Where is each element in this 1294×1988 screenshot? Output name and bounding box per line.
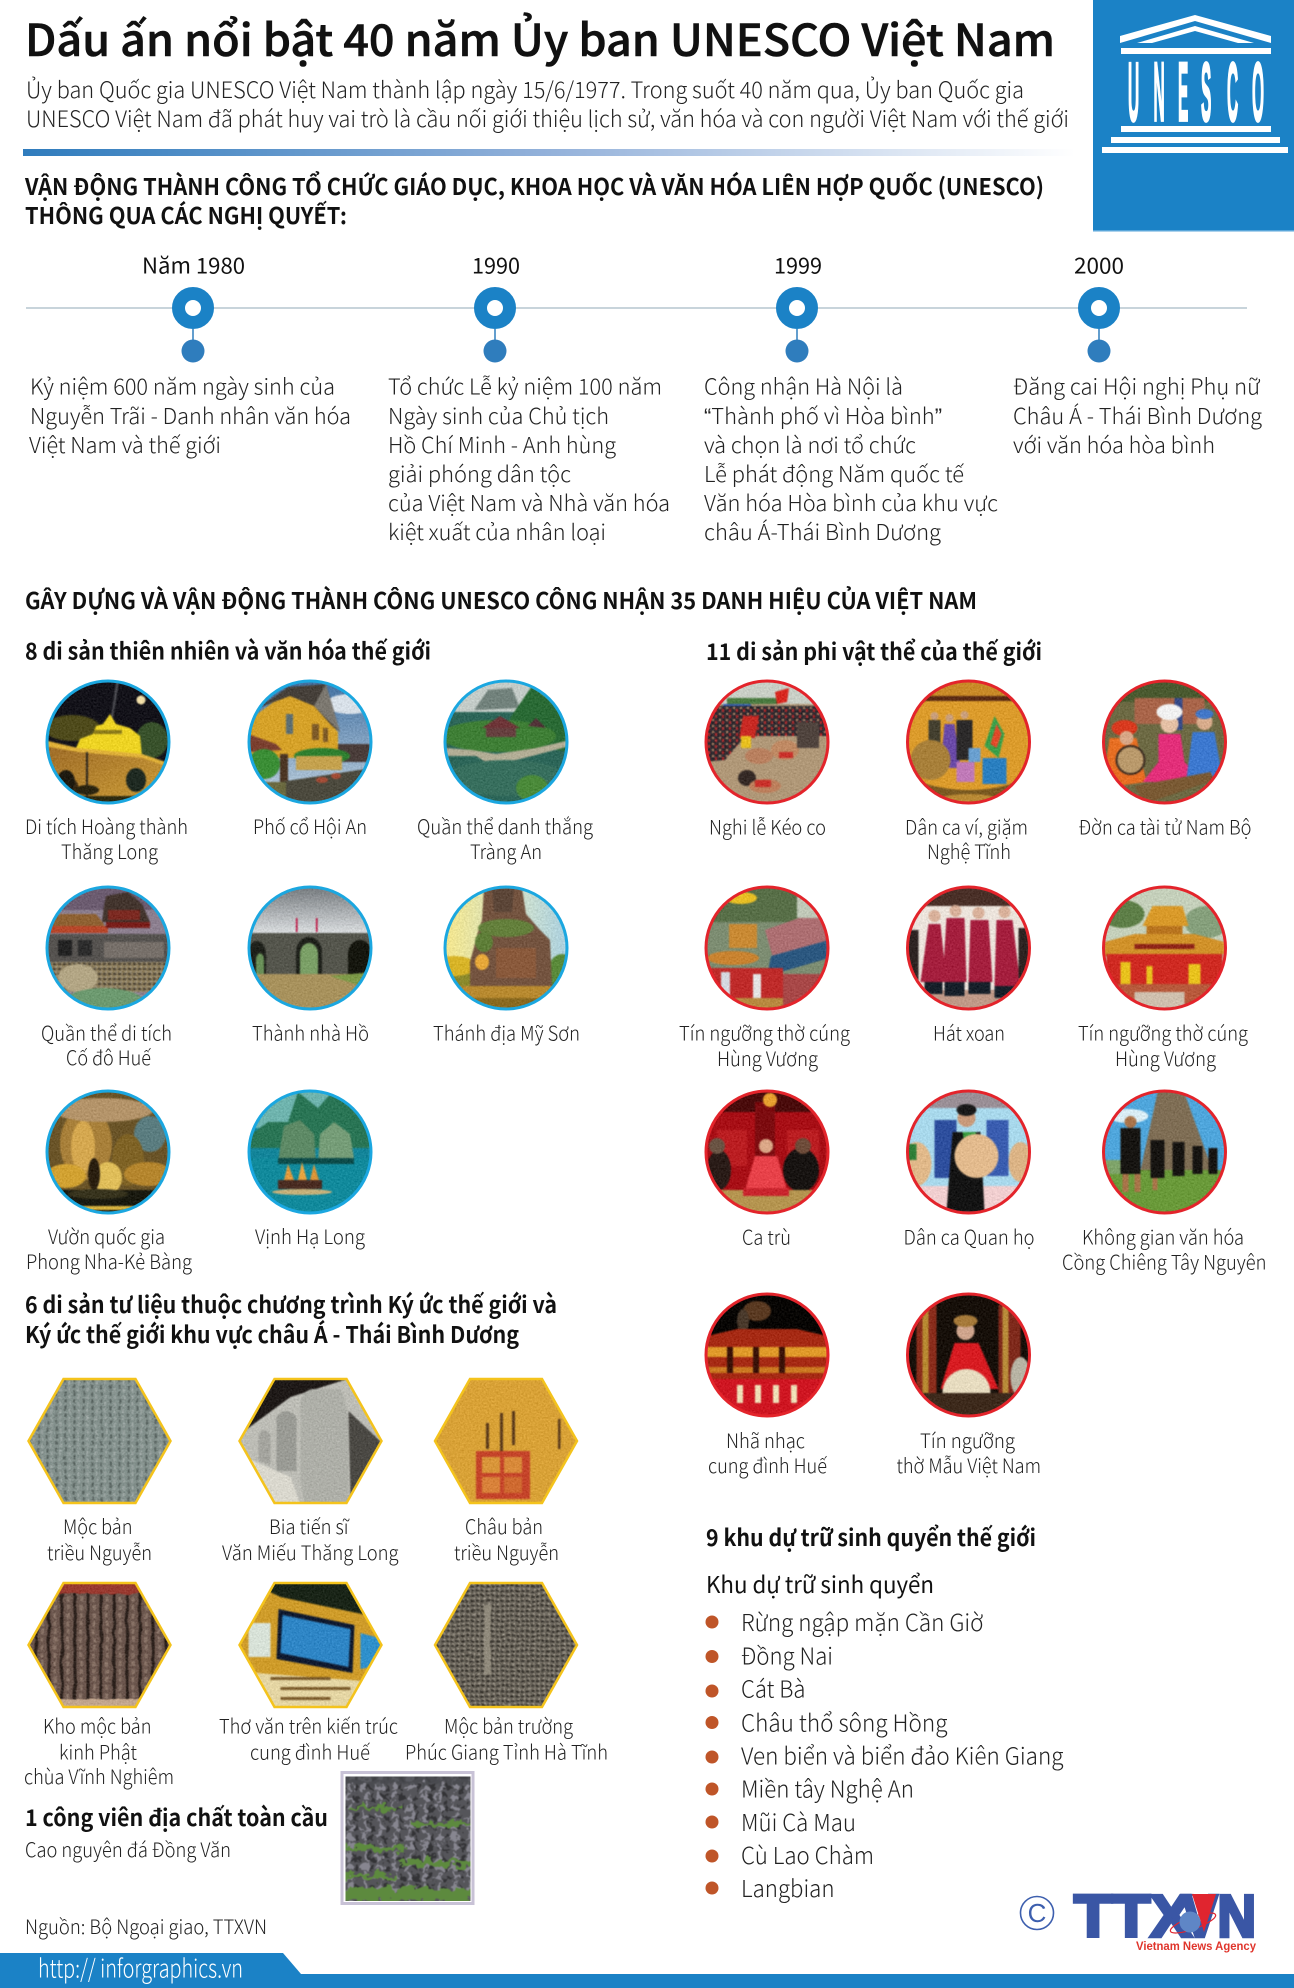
photo: Tin nguong Hung Vuong 1 [703,884,831,1012]
caption: Kho mộc bản [43,1710,152,1740]
timeline item: 1990: giải phóng dân tộc [388,457,571,489]
timeline item: 1999: “Thành phố vì Hòa bình” [704,399,942,431]
timeline [26,248,1262,547]
intro text: UNESCO Việt Nam đã phát huy vai trò là cầu nối giới thiệu lịch sử, văn hóa và con người Việt Nam với thế giới [26,102,1069,134]
timeline item: 1999: Lễ phát động Năm quốc tế [704,457,964,489]
timeline item: 2000: 2000 [1074,248,1124,280]
photo: Quan ho [902,1088,1032,1216]
caption: Phong Nha-Kẻ Bàng [26,1246,192,1275]
caption: Phố cổ Hội An [253,811,367,840]
caption [24,1710,174,1790]
subheading: 9 reserves: 9 khu dự trữ sinh quyển thế giới [706,1519,1036,1553]
photo: Dong Van plateau [325,1756,490,1921]
timeline item: 1980: Việt Nam và thế giới [29,428,221,460]
timeline item: 1999: Công nhận Hà Nội là [704,370,903,402]
hexagon: Phuc Giang [434,1582,578,1708]
subheading: 6 documentary heritages: 6 di sản tư liệu thuộc chương trình Ký ức thế giới và [25,1286,557,1320]
subheading: 8 heritage sites: 8 di sản thiên nhiên và văn hóa thế giới [25,632,431,666]
caption [26,1221,192,1275]
photo: Ha Long [246,1088,374,1216]
list of reserves: Mũi Cà Mau [741,1804,856,1838]
caption: Thánh địa Mỹ Sơn [433,1018,580,1046]
text: Dong Van: Cao nguyên đá Đồng Văn [25,1834,231,1863]
caption: Thành nhà Hồ [252,1018,369,1046]
photo: Hat xoan [904,884,1032,1012]
hexagon: Chau ban [434,1378,578,1504]
caption: Quần thể danh thắng [417,811,593,840]
panel: global geopark [25,1756,490,1921]
subheading: 6 documentary heritages: Ký ức thế giới khu vực châu Á - Thái Bình Dương [25,1316,519,1350]
caption: Thơ văn trên kiến trúc [219,1710,398,1740]
hexagon: Tho van Hue [238,1582,383,1708]
panel: UNESCO logo: UNESCO [1128,45,1264,139]
logo: TTXVN: C [1028,1898,1046,1928]
panel: documentary heritage [20,1286,608,1790]
caption: Quần thể di tích [41,1018,172,1046]
list of reserves: Châu thổ sông Hồng [741,1704,948,1738]
hexagon: Kho moc ban [27,1582,172,1708]
timeline item: 2000: với văn hóa hòa bình [1013,428,1215,460]
caption [405,1710,608,1766]
photo: Vi giam [904,678,1032,806]
list of reserves: Rừng ngập mặn Cần Giờ [741,1604,984,1638]
list heading: Khu dự trữ sinh quyển [706,1566,934,1600]
panel: world heritage sites [25,632,593,1275]
photo: Tin nguong Hung Vuong 2 [1100,884,1228,1012]
photo: Don ca tai tu [1100,678,1228,806]
photo: My Son [444,886,568,1010]
caption: Hùng Vương [1115,1043,1216,1072]
caption: triều Nguyễn [454,1537,559,1566]
caption: Mộc bản trường [444,1710,573,1740]
timeline item: 1990: Ngày sinh của Chủ tịch [388,399,609,431]
list of reserves [706,1604,1064,1904]
section heading: resolutions: THÔNG QUA CÁC NGHỊ QUYẾT: [25,197,347,231]
timeline item: 1999: và chọn là nơi tổ chức [704,428,916,460]
caption: Thăng Long [61,836,158,865]
caption: Nghệ Tĩnh [927,836,1011,865]
photo: Thanh nha Ho [246,884,374,1012]
caption: Vịnh Hạ Long [255,1221,365,1250]
title: Dấu ấn nổi bật 40 năm Ủy ban UNESCO Việt Nam [25,5,1055,69]
caption: thờ Mẫu Việt Nam [896,1450,1041,1479]
caption: Không gian văn hóa [1082,1222,1244,1250]
photo: Hoi An [246,678,374,806]
timeline item: 1980: Kỷ niệm 600 năm ngày sinh của [30,370,335,402]
subheading: 6 documentary heritages [25,1286,557,1350]
timeline item: 1990: 1990 [472,248,520,280]
caption: Dân ca ví, giặm [905,812,1028,840]
photo: Ca tru [703,1088,831,1216]
timeline item: 1999: Văn hóa Hòa bình của khu vực [704,486,998,518]
caption: Nhã nhạc [726,1425,805,1454]
caption: Bia tiến sĩ [269,1511,350,1540]
list of reserves: Đồng Nai [741,1638,833,1672]
logo: TTXVN: VN [1182,1884,1256,1950]
caption [25,811,188,865]
timeline item: 1990: kiệt xuất của nhân loại [388,515,606,547]
caption: Châu bản [465,1511,543,1540]
caption: Nghi lễ Kéo co [709,812,826,840]
caption: cung đình Huế [708,1450,827,1479]
timeline item: 1990: Tổ chức Lễ kỷ niệm 100 năm [388,370,662,402]
caption: Văn Miếu Thăng Long [222,1537,399,1566]
photo: Tho Mau [904,1291,1032,1419]
caption: Vườn quốc gia [48,1221,165,1250]
caption: Tín ngưỡng thờ cúng [1078,1018,1248,1046]
hexagon: Moc ban trieu Nguyen [27,1378,172,1504]
list of reserves: Langbian [741,1870,834,1904]
list of reserves: Cát Bà [741,1670,806,1704]
footer band: http:// inforgraphics.vn [38,1950,243,1986]
caption [454,1511,559,1566]
subheading: geopark: 1 công viên địa chất toàn cầu [25,1799,328,1833]
photo: Nha nhac [703,1291,831,1419]
caption [219,1710,398,1766]
timeline item: 1990 [388,248,670,547]
footer band [0,1950,1294,1988]
caption: Dân ca Quan họ [904,1222,1034,1250]
panel: biosphere reserves [706,1519,1064,1904]
section heading: resolutions [24,168,1044,231]
section heading: 35 titles: GÂY DỰNG VÀ VẬN ĐỘNG THÀNH CÔNG UNESCO CÔNG NHẬN 35 DANH HIỆU CỦA VIỆT NAM [25,582,977,616]
intro text [26,73,1069,134]
hexagon: Bia tien si [238,1378,383,1504]
timeline item: 2000 [1013,248,1262,460]
caption [905,812,1028,865]
caption: Cồng Chiêng Tây Nguyên [1062,1246,1266,1276]
photo: Keo co [703,678,831,806]
caption: Ca trù [742,1222,791,1250]
caption: Phúc Giang Tỉnh Hà Tĩnh [405,1736,608,1766]
list of reserves: Ven biển và biển đảo Kiên Giang [741,1738,1064,1772]
caption: Mộc bản [63,1511,132,1540]
caption: Tràng An [470,836,542,865]
caption [41,1018,172,1071]
list of reserves: Miền tây Nghệ An [741,1770,914,1804]
timeline item: 2000: Đăng cai Hội nghị Phụ nữ [1013,370,1261,402]
photo: Trang An [440,678,570,806]
caption [47,1511,152,1566]
timeline item: 1980: Nguyễn Trãi - Danh nhân văn hóa [30,399,351,431]
caption [896,1425,1041,1479]
gradient divider [23,149,1075,156]
timeline item: 1990: của Việt Nam và Nhà văn hóa [388,486,670,518]
caption [679,1018,850,1072]
logo: TTXVN [1020,1884,1256,1953]
caption [708,1425,827,1479]
caption: Đờn ca tài tử Nam Bộ [1078,812,1252,840]
list of reserves: Cù Lao Chàm [741,1837,874,1871]
caption: Cố đô Huế [66,1042,151,1071]
photo: Hoang thanh Thang Long [44,678,172,806]
timeline item: 1999: châu Á-Thái Bình Dương [704,515,941,547]
caption: Hùng Vương [717,1043,818,1072]
subheading: 11 intangible heritages: 11 di sản phi vật thể của thế giới [706,633,1042,667]
caption: Hát xoan [933,1018,1005,1046]
photo: Cong chieng [1100,1088,1228,1216]
caption: Tín ngưỡng thờ cúng [679,1018,850,1046]
caption: chùa Vĩnh Nghiêm [24,1761,174,1790]
timeline item: 2000: Châu Á - Thái Bình Dương [1013,399,1262,431]
timeline item: 1980 [29,248,351,460]
caption [417,811,593,865]
caption: kinh Phật [59,1736,137,1766]
timeline item: 1999: 1999 [774,248,822,280]
caption: triều Nguyễn [47,1537,152,1566]
logo: TTXVN: TTX [1074,1884,1192,1950]
caption: Tín ngưỡng [920,1425,1015,1454]
source note: Nguồn: Bộ Ngoại giao, TTXVN [25,1911,267,1940]
photo: Co do Hue [44,884,172,1016]
section heading: resolutions: VẬN ĐỘNG THÀNH CÔNG TỔ CHỨC GIÁO DỤC, KHOA HỌC VÀ VĂN HÓA LIÊN HỢP QUỐC (UNESCO) [24,168,1044,202]
panel: intangible heritage [679,633,1266,1479]
intro text: Ủy ban Quốc gia UNESCO Việt Nam thành lập ngày 15/6/1977. Trong suốt 40 năm qua, Ủy ban Quốc gia [26,73,1024,105]
photo: Phong Nha [44,1088,172,1216]
timeline item: 1999 [704,248,998,547]
logo: TTXVN: Vietnam News Agency [1136,1939,1256,1953]
caption: Di tích Hoàng thành [25,811,188,840]
caption [1078,1018,1248,1072]
timeline item: 1980: Năm 1980 [142,248,245,280]
caption: cung đình Huế [250,1736,370,1766]
caption [222,1511,399,1566]
panel: UNESCO logo [1093,0,1294,232]
caption [1062,1222,1266,1276]
timeline item: 1990: Hồ Chí Minh - Anh hùng [388,428,616,460]
